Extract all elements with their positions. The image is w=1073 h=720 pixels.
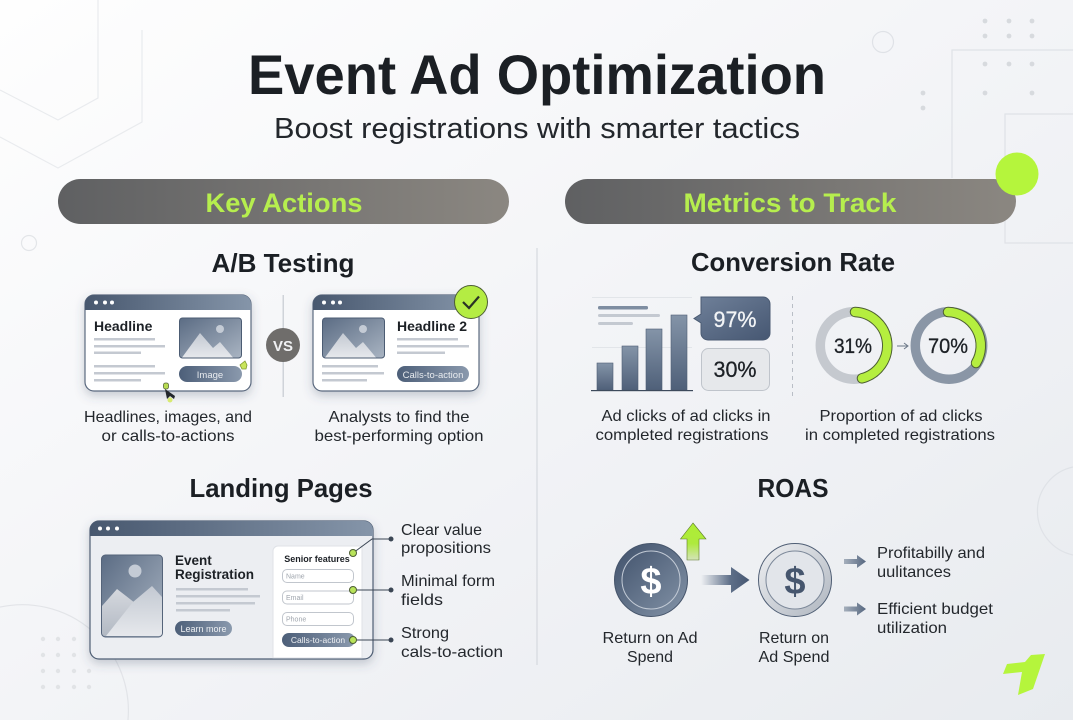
signup form: Phone <box>286 616 306 624</box>
title: Event Ad Optimization <box>248 43 826 106</box>
landing page mockup <box>90 521 373 659</box>
caption: bar chart: Ad clicks of ad clicks in <box>602 408 770 425</box>
benefit: budget: utilization <box>877 620 947 637</box>
section header: Metrics to Track <box>565 179 1016 224</box>
A/B variant A window: Image <box>197 370 223 381</box>
stat: 97% <box>694 297 770 340</box>
A/B variant A window: Headline <box>94 318 153 334</box>
caption: donuts: Proportion of ad clicks <box>820 408 982 425</box>
section header: Key Actions: Key Actions <box>206 188 362 218</box>
accent circle <box>996 152 1038 196</box>
caption: variant B <box>314 409 484 445</box>
caption: variant A: or calls-to-actions <box>102 428 234 445</box>
donut: 70% <box>915 312 983 379</box>
callout: Clear value propositions: Clear value <box>401 522 482 539</box>
caption: donuts: in completed registrations <box>805 427 995 444</box>
heading: A/B Testing: A/B Testing <box>212 248 354 278</box>
heading: Landing Pages: Landing Pages <box>190 473 372 503</box>
landing page mockup: Event <box>175 553 212 568</box>
arrow: profitability <box>844 555 866 568</box>
signup form <box>273 546 362 658</box>
icon: light dollar coin <box>758 544 832 616</box>
callout: Minimal form fields <box>401 573 495 609</box>
A/B variant B window: Headline 2 <box>397 318 467 334</box>
callout: Clear value propositions <box>401 522 491 557</box>
donut: 31% <box>820 312 888 379</box>
A/B variant B window <box>313 295 479 391</box>
caption: coin 2: Return on <box>759 630 829 647</box>
caption: bar chart <box>596 408 770 444</box>
icon: brand logo <box>1003 654 1045 695</box>
subtitle: Boost registrations with smarter tactics <box>274 113 800 145</box>
dashed divider <box>792 296 794 398</box>
callout: Minimal form fields: fields <box>401 592 443 609</box>
benefit: profitability <box>877 545 985 581</box>
caption: coin 1: Return on Ad <box>602 630 698 647</box>
donut: 70%: 70% <box>928 334 968 358</box>
icon: light dollar coin: $ <box>784 561 806 603</box>
signup form: Name <box>286 574 305 580</box>
caption: coin 2 <box>758 630 830 666</box>
heading: Conversion Rate: Conversion Rate <box>691 247 895 277</box>
column divider <box>536 248 538 665</box>
caption: variant A <box>84 409 252 445</box>
VS divider: VS <box>273 338 293 355</box>
arrow: coin to coin <box>701 567 750 593</box>
caption: bar chart: completed registrations <box>596 427 768 444</box>
donut: 31%: 31% <box>834 334 872 358</box>
VS divider <box>266 295 300 397</box>
callout: Minimal form fields: Minimal form <box>401 573 495 590</box>
signup form: Email <box>286 595 304 602</box>
callout connectors <box>350 536 394 644</box>
caption: variant A: Headlines, images, and <box>84 409 252 426</box>
section header: Metrics to Track: Metrics to Track <box>684 188 898 218</box>
A/B variant B window: Calls-to-action <box>403 370 463 381</box>
callout: Strong calls-to-action <box>401 625 503 661</box>
benefit: budget <box>877 601 994 637</box>
benefit: profitability: uulitances <box>877 564 951 581</box>
signup form: Calls-to-action <box>291 635 345 645</box>
stat: 97%: 97% <box>714 307 756 332</box>
icon: dark dollar coin <box>614 544 688 616</box>
arrow between donuts <box>897 343 908 349</box>
A/B variant A window <box>85 295 251 402</box>
benefit: profitability: Profitabilly and <box>877 545 985 562</box>
bar chart <box>591 297 693 391</box>
caption: variant B: Analysts to find the <box>328 409 470 426</box>
decorative background shapes <box>0 0 142 720</box>
section header: Key Actions <box>58 179 509 224</box>
caption: donuts <box>805 408 995 444</box>
stat: 30% <box>702 348 770 390</box>
landing page mockup: Learn more <box>180 624 227 634</box>
icon: dark dollar coin: $ <box>640 561 662 603</box>
arrow: efficient budget <box>844 602 866 616</box>
callout: Strong calls-to-action: cals-to-action <box>401 644 503 661</box>
caption: coin 1: Spend <box>627 649 673 666</box>
caption: coin 1 <box>602 630 698 666</box>
callout: Strong calls-to-action: Strong <box>401 625 449 642</box>
icon: winner check badge <box>454 286 488 318</box>
icon: growth arrow up <box>680 523 706 560</box>
stat: 30%: 30% <box>714 357 756 382</box>
signup form: Senior features <box>284 554 350 564</box>
caption: coin 2: Ad Spend <box>758 649 830 666</box>
caption: variant B: best-performing option <box>314 428 484 445</box>
callout: Clear value propositions: propositions <box>401 540 491 557</box>
benefit: budget: Efficient budget <box>877 601 994 618</box>
heading: ROAS: ROAS <box>758 473 828 503</box>
landing page mockup: Registration <box>175 567 254 582</box>
